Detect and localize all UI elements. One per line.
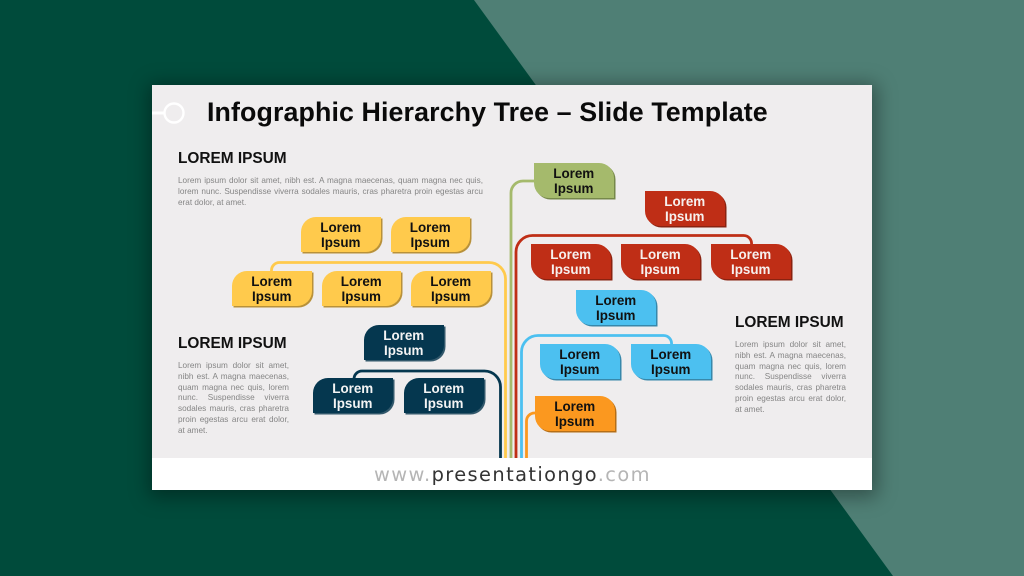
body text: right: nunc. Suspendisse viverra xyxy=(735,372,846,381)
body text: right: proin egestas arcu erat dolor, xyxy=(735,394,846,403)
node: red 2: Lorem xyxy=(550,247,591,262)
node: green xyxy=(534,163,614,198)
node: orange: Lorem xyxy=(554,399,595,414)
node group: blue xyxy=(540,290,712,380)
node: green: Lorem xyxy=(553,166,594,181)
icon: title ring marker xyxy=(152,102,184,124)
node: blue 1 xyxy=(576,290,656,325)
node: yellow 3 xyxy=(232,271,312,306)
footer url: www.presentationgo.com xyxy=(374,463,651,486)
node: yellow 3: Ipsum xyxy=(252,289,291,304)
body text: right xyxy=(735,340,846,414)
node: navy 1: Ipsum xyxy=(384,343,423,358)
text block: bottom left xyxy=(178,335,290,435)
title: Infographic Hierarchy Tree – Slide Template xyxy=(207,97,768,127)
connector: green xyxy=(511,181,535,458)
node: blue 2: Lorem xyxy=(559,347,600,362)
node: yellow 1 xyxy=(301,217,380,252)
heading: right: LOREM IPSUM xyxy=(735,314,844,331)
node: yellow 4: Ipsum xyxy=(342,289,381,304)
node: green: Ipsum xyxy=(554,181,593,196)
node: navy 3: Ipsum xyxy=(424,396,463,411)
body text: bottom left: nunc. Suspendisse viverra xyxy=(178,393,289,402)
node: yellow 1: Ipsum xyxy=(321,235,360,250)
node: yellow 5: Lorem xyxy=(430,274,471,289)
node: yellow 2: Lorem xyxy=(410,220,451,235)
node: red 4 xyxy=(711,244,790,279)
footer band xyxy=(152,458,872,490)
node group: red xyxy=(531,191,792,280)
node: red 2 xyxy=(531,244,610,279)
text block: top left xyxy=(178,150,483,207)
node: blue 2 xyxy=(540,344,620,379)
node: blue 1: Lorem xyxy=(595,293,636,308)
body text: right: sodales mauris, cras pharetra xyxy=(735,383,846,392)
node: red 3: Ipsum xyxy=(641,262,680,277)
body text: bottom left: nibh est. A magna maecenas, xyxy=(178,372,289,381)
node: red 3 xyxy=(620,244,700,279)
node: navy 3: Lorem xyxy=(423,381,464,396)
node: yellow 4 xyxy=(322,271,401,306)
node: red 1 xyxy=(645,191,724,226)
connector: blue xyxy=(522,335,672,458)
node: red 4: Lorem xyxy=(730,247,771,262)
node: yellow 2: Ipsum xyxy=(411,235,450,250)
node: navy 1: Lorem xyxy=(383,328,424,343)
node: blue 1: Ipsum xyxy=(596,308,635,323)
node: red 4: Ipsum xyxy=(731,262,770,277)
node: yellow 1: Lorem xyxy=(320,220,361,235)
node: navy 2: Ipsum xyxy=(333,396,372,411)
node: red 1: Lorem xyxy=(664,194,705,209)
heading: bottom left: LOREM IPSUM xyxy=(178,335,287,352)
node: blue 3: Ipsum xyxy=(651,362,690,377)
connector: yellow xyxy=(271,262,506,458)
node group: navy xyxy=(313,325,486,414)
node: yellow 4: Lorem xyxy=(341,274,382,289)
body text: right: quam magna nec quis, lorem xyxy=(735,362,846,371)
body text: bottom left: proin egestas arcu erat dolor, xyxy=(178,415,289,424)
body text: top left: lorem nunc. Suspendisse viverra sodales mauris, cras pharetra proin egestas arcu xyxy=(178,187,483,196)
body text: right: at amet. xyxy=(735,405,765,414)
body text: top left xyxy=(178,176,483,207)
body text: top left: Lorem ipsum dolor sit amet, nibh est. A magna maecenas, quam magna nec quis, xyxy=(178,176,483,185)
connector: orange xyxy=(526,413,537,458)
node: blue 3: Lorem xyxy=(650,347,691,362)
node: blue 3 xyxy=(631,344,710,379)
body text: bottom left: sodales mauris, cras pharetra xyxy=(178,404,289,413)
body text: right: Lorem ipsum dolor sit amet, xyxy=(735,340,846,349)
body text: top left: erat dolor, at amet. xyxy=(178,198,246,207)
body text: bottom left: Lorem ipsum dolor sit amet, xyxy=(178,361,289,370)
node: red 3: Lorem xyxy=(640,247,681,262)
body text: bottom left: at amet. xyxy=(178,426,208,435)
node: blue 2: Ipsum xyxy=(560,362,599,377)
heading: top left: LOREM IPSUM xyxy=(178,150,287,167)
node: navy 2: Lorem xyxy=(332,381,373,396)
node group: yellow xyxy=(232,217,492,308)
slide card xyxy=(152,85,872,490)
connector: navy xyxy=(354,371,500,458)
body text: bottom left: quam magna nec quis, lorem xyxy=(178,383,289,392)
node: navy 3 xyxy=(404,378,484,413)
node: navy 2 xyxy=(313,378,392,413)
node: orange xyxy=(535,396,614,431)
node: red 2: Ipsum xyxy=(551,262,590,277)
text block: right xyxy=(735,314,846,414)
body text: right: nibh est. A magna maecenas, xyxy=(735,351,846,360)
node: orange: Ipsum xyxy=(555,414,594,429)
connector: red xyxy=(516,235,752,458)
node: yellow 3: Lorem xyxy=(251,274,292,289)
node: navy 1 xyxy=(364,325,444,360)
body text: bottom left xyxy=(178,361,290,435)
node: yellow 5: Ipsum xyxy=(431,289,470,304)
node: yellow 5 xyxy=(411,271,490,306)
node: yellow 2 xyxy=(390,217,470,252)
node: red 1: Ipsum xyxy=(665,209,704,224)
